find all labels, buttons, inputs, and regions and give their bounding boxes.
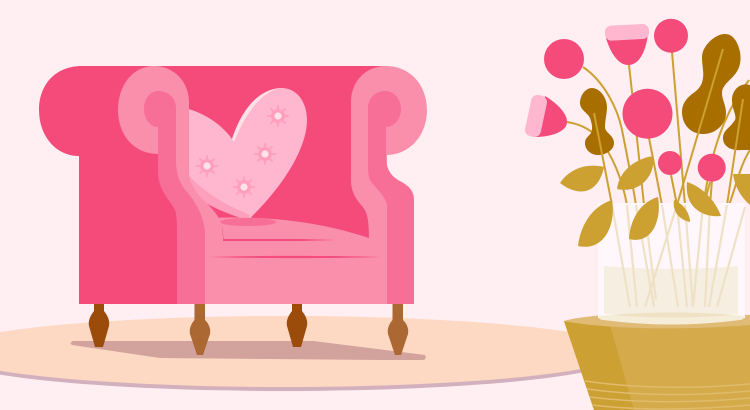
- flower motifs: [197, 106, 288, 197]
- leaf: lower left: [578, 200, 613, 247]
- left arm: [118, 66, 223, 304]
- table body: [564, 321, 750, 410]
- glass vase: [598, 203, 745, 324]
- leaf: right edge: [733, 174, 750, 205]
- leg: front left: [190, 304, 210, 355]
- table stripes: [585, 381, 750, 409]
- brown leaves: [580, 34, 750, 205]
- leaf: lower centre: [629, 197, 659, 240]
- chair legs: [89, 304, 408, 355]
- leaf: right centre: [687, 182, 721, 216]
- seat crease: [208, 256, 381, 258]
- flower: small right: [698, 154, 726, 182]
- table top: [564, 314, 750, 328]
- flower: top left: [544, 39, 584, 79]
- gold leaves: [560, 156, 750, 247]
- flower: small middle: [658, 151, 682, 175]
- tulip: left: [524, 94, 567, 138]
- stems inside vase: [612, 205, 745, 307]
- leaf: centre upper: [617, 156, 653, 190]
- rug: [0, 316, 625, 391]
- leaf: far left: [560, 166, 604, 191]
- brown leaf: right: [723, 84, 750, 150]
- heart cushion: [180, 88, 307, 220]
- seat cushion: [205, 217, 390, 304]
- leaf veins: [594, 49, 743, 205]
- leaf: small centre: [674, 200, 690, 222]
- leg: back right: [287, 304, 307, 347]
- leg: back left: [89, 304, 109, 347]
- flower stems above vase: [567, 52, 750, 205]
- brown leaf: large: [682, 34, 741, 134]
- flower heads: [524, 19, 726, 182]
- flower: top: [654, 19, 688, 53]
- chair back: [39, 66, 386, 304]
- brown leaf: left: [580, 88, 614, 155]
- flower: large: [622, 89, 672, 139]
- vase base: [599, 312, 744, 324]
- vase water: [604, 266, 738, 314]
- armchair: [39, 66, 427, 304]
- right arm: [351, 66, 427, 304]
- leg: front right: [388, 304, 408, 355]
- armchair shadow: [71, 341, 426, 360]
- side table: [564, 314, 750, 410]
- tulip: top: [605, 24, 649, 65]
- table shaded side: [564, 321, 634, 410]
